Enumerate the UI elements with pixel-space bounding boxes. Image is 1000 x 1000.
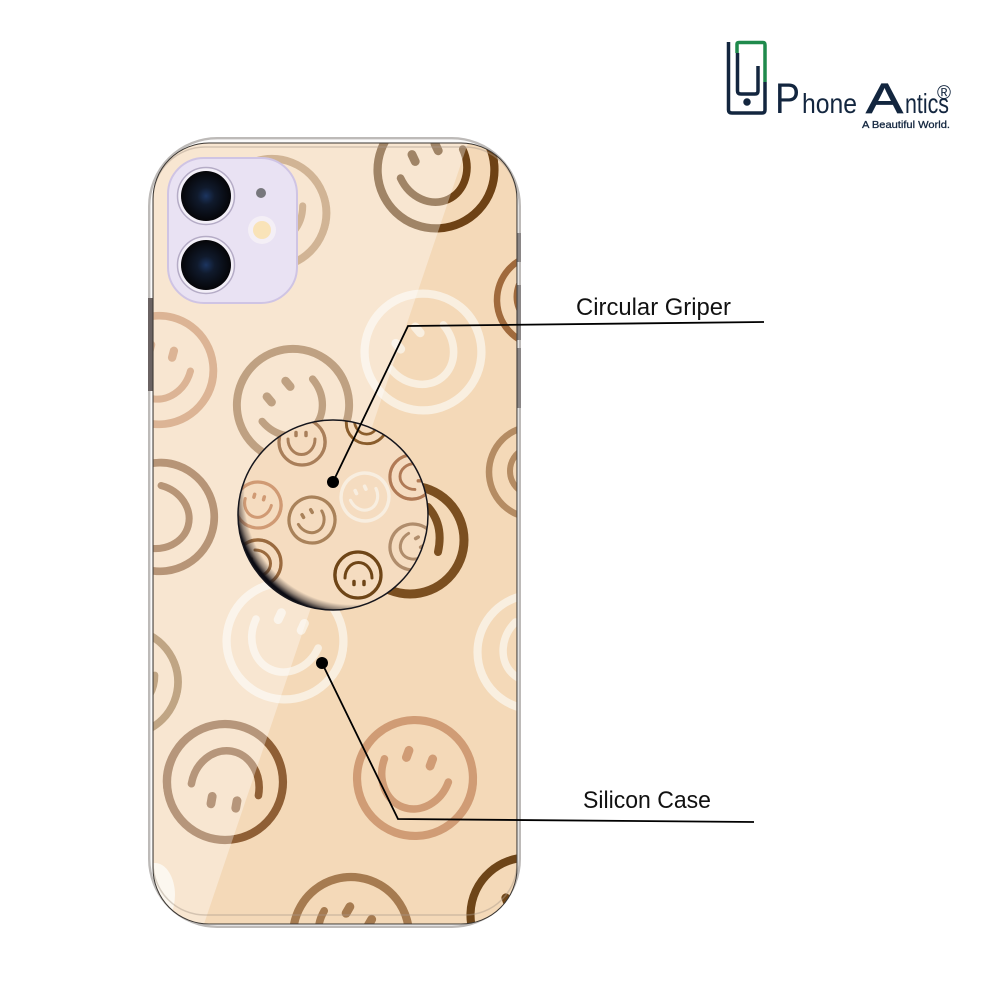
leader line case bbox=[322, 663, 754, 822]
smileys pattern bbox=[72, 91, 618, 1000]
bottom lens bbox=[178, 236, 234, 294]
griper smileys bbox=[238, 422, 426, 600]
leader line griper bbox=[333, 322, 764, 482]
case outer rim bbox=[149, 138, 520, 927]
logo wordmark: A bbox=[866, 75, 903, 123]
callout: silicon case bbox=[316, 657, 754, 822]
printed artwork bbox=[154, 144, 516, 924]
logo: Phone Antics bbox=[728, 42, 951, 131]
logo wordmark bbox=[775, 75, 951, 131]
logo wordmark: hone bbox=[802, 88, 857, 119]
inner bevel line bbox=[153, 147, 517, 915]
camera module bbox=[168, 158, 297, 303]
logo wordmark: P bbox=[775, 75, 800, 123]
logo phone icon bbox=[728, 42, 765, 113]
logo wordmark: ® bbox=[937, 83, 951, 104]
circular griper bbox=[237, 419, 429, 611]
callout: circular griper bbox=[327, 294, 764, 488]
phone case bbox=[148, 137, 521, 928]
side buttons bbox=[148, 233, 521, 408]
griper edge shadow bbox=[238, 420, 428, 610]
flash bbox=[248, 216, 276, 244]
microphone dot bbox=[256, 188, 266, 198]
label silicon case: Silicon Case bbox=[583, 787, 711, 814]
logo wordmark: A Beautiful World. bbox=[862, 119, 950, 131]
artwork edge line bbox=[153, 143, 517, 924]
logo wordmark: ntics bbox=[905, 88, 949, 119]
label circular griper: Circular Griper bbox=[576, 294, 731, 321]
smiley behind griper bbox=[387, 483, 468, 598]
top lens bbox=[178, 168, 234, 224]
glass reflection bbox=[153, 143, 468, 924]
